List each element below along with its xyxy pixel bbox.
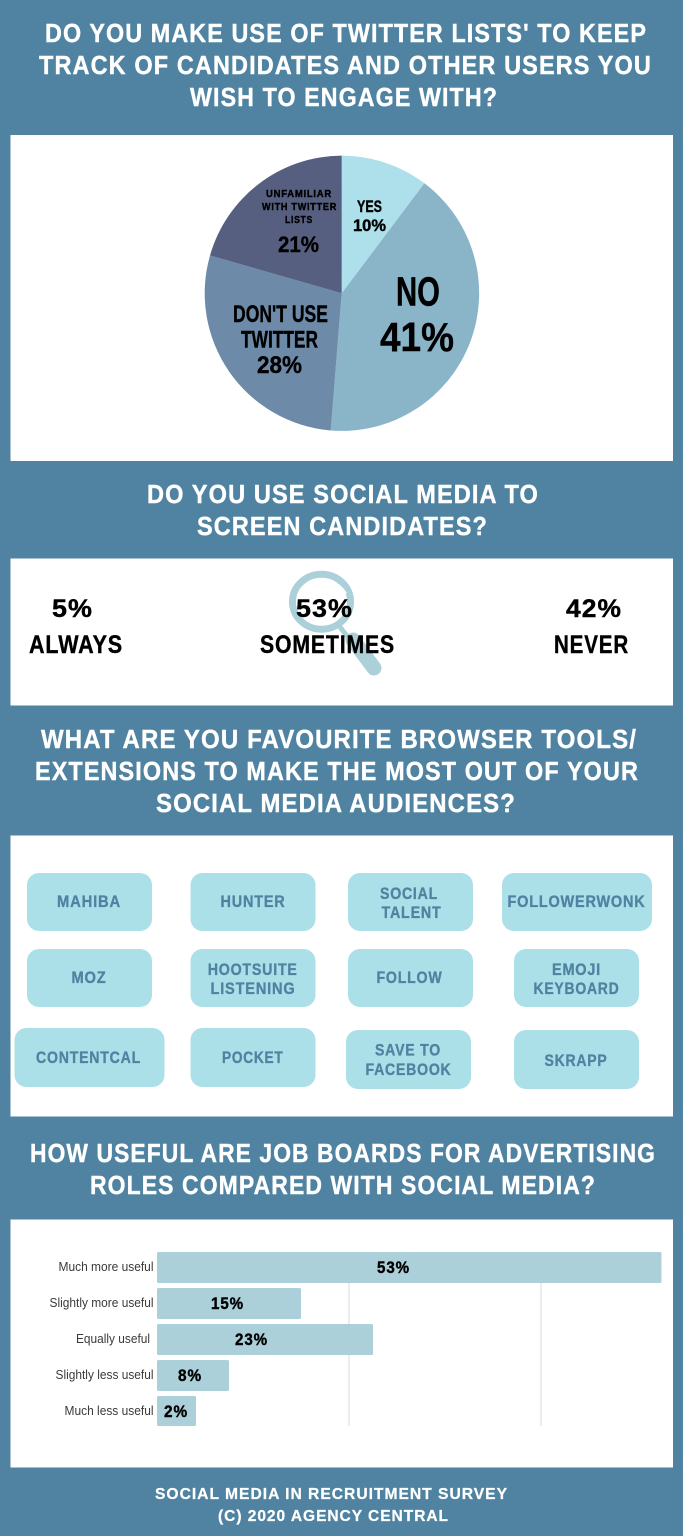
tool: ContentCal xyxy=(14,1028,164,1087)
pie label: no: NO xyxy=(396,268,440,314)
stat: never: 42% xyxy=(566,595,622,623)
panel: bar chart xyxy=(10,1220,673,1468)
bar: much less useful: 2% xyxy=(164,1402,188,1421)
bar: equally useful: Equally useful xyxy=(76,1332,150,1346)
tool: Follow xyxy=(348,949,473,1007)
pie label: don't use twitter: TWITTER xyxy=(241,326,318,354)
pie slice: no xyxy=(331,183,479,431)
bar: slightly less useful: 8% xyxy=(178,1366,202,1385)
tool: Save to Facebook: FACEBOOK xyxy=(366,1061,452,1079)
heading: browser tools question: SOCIAL MEDIA AUDIENCES? xyxy=(156,790,516,818)
stat: sometimes: SOMETIMES xyxy=(260,631,395,659)
pie label: unfamiliar: LISTS xyxy=(285,215,313,226)
bar: much more useful xyxy=(58,1252,662,1283)
heading: screening question: SCREEN CANDIDATES? xyxy=(197,513,488,541)
tool: Pocket xyxy=(190,1028,316,1087)
tool: Social Talent: SOCIAL xyxy=(380,885,438,903)
pie label: unfamiliar: 21% xyxy=(278,232,319,257)
tool: Followerwonk xyxy=(502,873,652,931)
pie label: yes xyxy=(353,197,386,235)
heading: twitter lists question xyxy=(39,20,652,112)
tool: Emoji Keyboard: KEYBOARD xyxy=(534,980,620,998)
icon: magnifying glass xyxy=(292,574,374,668)
bar: much more useful: Much more useful xyxy=(58,1260,154,1274)
panel: screening results xyxy=(10,558,673,706)
heading: twitter lists question: WISH TO ENGAGE WITH? xyxy=(190,84,498,112)
tool: Skrapp: SKRAPP xyxy=(544,1052,608,1070)
tool: Save to Facebook xyxy=(346,1030,471,1089)
heading: browser tools question xyxy=(35,726,639,818)
stat: always xyxy=(29,595,123,659)
pie label: yes: 10% xyxy=(353,216,386,235)
bar: slightly more useful xyxy=(50,1288,301,1319)
pie label: unfamiliar xyxy=(262,189,337,257)
pie label: no xyxy=(380,268,454,360)
heading: browser tools question: WHAT ARE YOU FAVOURITE BROWSER TOOLS/ xyxy=(41,726,637,754)
tool: Moz xyxy=(27,949,152,1007)
heading: browser tools question: EXTENSIONS TO MAKE THE MOST OUT OF YOUR xyxy=(35,758,639,786)
pie label: don't use twitter: DON'T USE xyxy=(233,301,328,328)
footer credit: (C) 2020 AGENCY CENTRAL xyxy=(218,1508,449,1525)
stat: sometimes xyxy=(260,595,395,659)
stat: always: ALWAYS xyxy=(29,631,123,659)
bar: equally useful: 23% xyxy=(235,1330,268,1349)
tool: Hootsuite Listening: LISTENING xyxy=(210,980,296,998)
bar: slightly more useful: 15% xyxy=(211,1294,244,1313)
tool: Mahiba xyxy=(27,873,152,931)
footer credit: SOCIAL MEDIA IN RECRUITMENT SURVEY xyxy=(155,1486,508,1503)
tool: Emoji Keyboard xyxy=(514,949,639,1007)
pie slice: yes xyxy=(342,156,424,293)
pie label: yes: YES xyxy=(357,197,382,216)
bar: equally useful xyxy=(76,1324,373,1355)
heading: screening question: DO YOU USE SOCIAL MEDIA TO xyxy=(147,481,539,509)
tool: Emoji Keyboard: EMOJI xyxy=(552,961,601,979)
tool: Hootsuite Listening: HOOTSUITE xyxy=(208,961,298,979)
pie label: unfamiliar: UNFAMILIAR xyxy=(266,189,332,200)
pie label: no: 41% xyxy=(380,314,454,360)
bar: slightly more useful: Slightly more useful xyxy=(50,1296,154,1310)
tool: Skrapp xyxy=(514,1030,639,1089)
tool: Followerwonk: FOLLOWERWONK xyxy=(508,893,646,911)
pie label: don't use twitter xyxy=(233,301,328,379)
panel: pie chart xyxy=(10,135,673,461)
tool: ContentCal: CONTENTCAL xyxy=(36,1049,141,1067)
stat: never: NEVER xyxy=(554,631,629,659)
tool: Save to Facebook: SAVE TO xyxy=(375,1042,441,1060)
pie label: don't use twitter: 28% xyxy=(257,352,302,379)
tool: Social Talent xyxy=(348,873,473,931)
stat: sometimes: 53% xyxy=(296,595,353,623)
bar: much less useful xyxy=(64,1396,196,1426)
tool: Hootsuite Listening xyxy=(190,949,316,1007)
bar: much less useful: Much less useful xyxy=(64,1404,154,1418)
footer credit xyxy=(155,1486,508,1525)
tool: Pocket: POCKET xyxy=(222,1049,284,1067)
bar: slightly less useful: Slightly less useful xyxy=(56,1368,154,1382)
pie slice: don't use twitter xyxy=(205,256,342,430)
heading: job boards question: ROLES COMPARED WITH SOCIAL MEDIA? xyxy=(90,1172,596,1200)
tool: Hunter xyxy=(190,873,316,931)
heading: job boards question xyxy=(30,1140,656,1200)
stat: never xyxy=(554,595,629,659)
tool: Mahiba: MAHIBA xyxy=(57,893,121,911)
pie slice: unfamiliar xyxy=(210,156,342,293)
panel: browser tools xyxy=(10,836,673,1116)
bar: slightly less useful xyxy=(56,1360,229,1391)
heading: screening question xyxy=(147,481,539,541)
pie label: unfamiliar: WITH TWITTER xyxy=(262,202,337,213)
tool: Hunter: HUNTER xyxy=(220,893,286,911)
tool: Follow: FOLLOW xyxy=(376,969,442,987)
tool: Social Talent: TALENT xyxy=(382,904,442,922)
tool: Moz: MOZ xyxy=(72,969,106,987)
stat: always: 5% xyxy=(52,595,93,623)
bar: much more useful: 53% xyxy=(377,1258,410,1277)
